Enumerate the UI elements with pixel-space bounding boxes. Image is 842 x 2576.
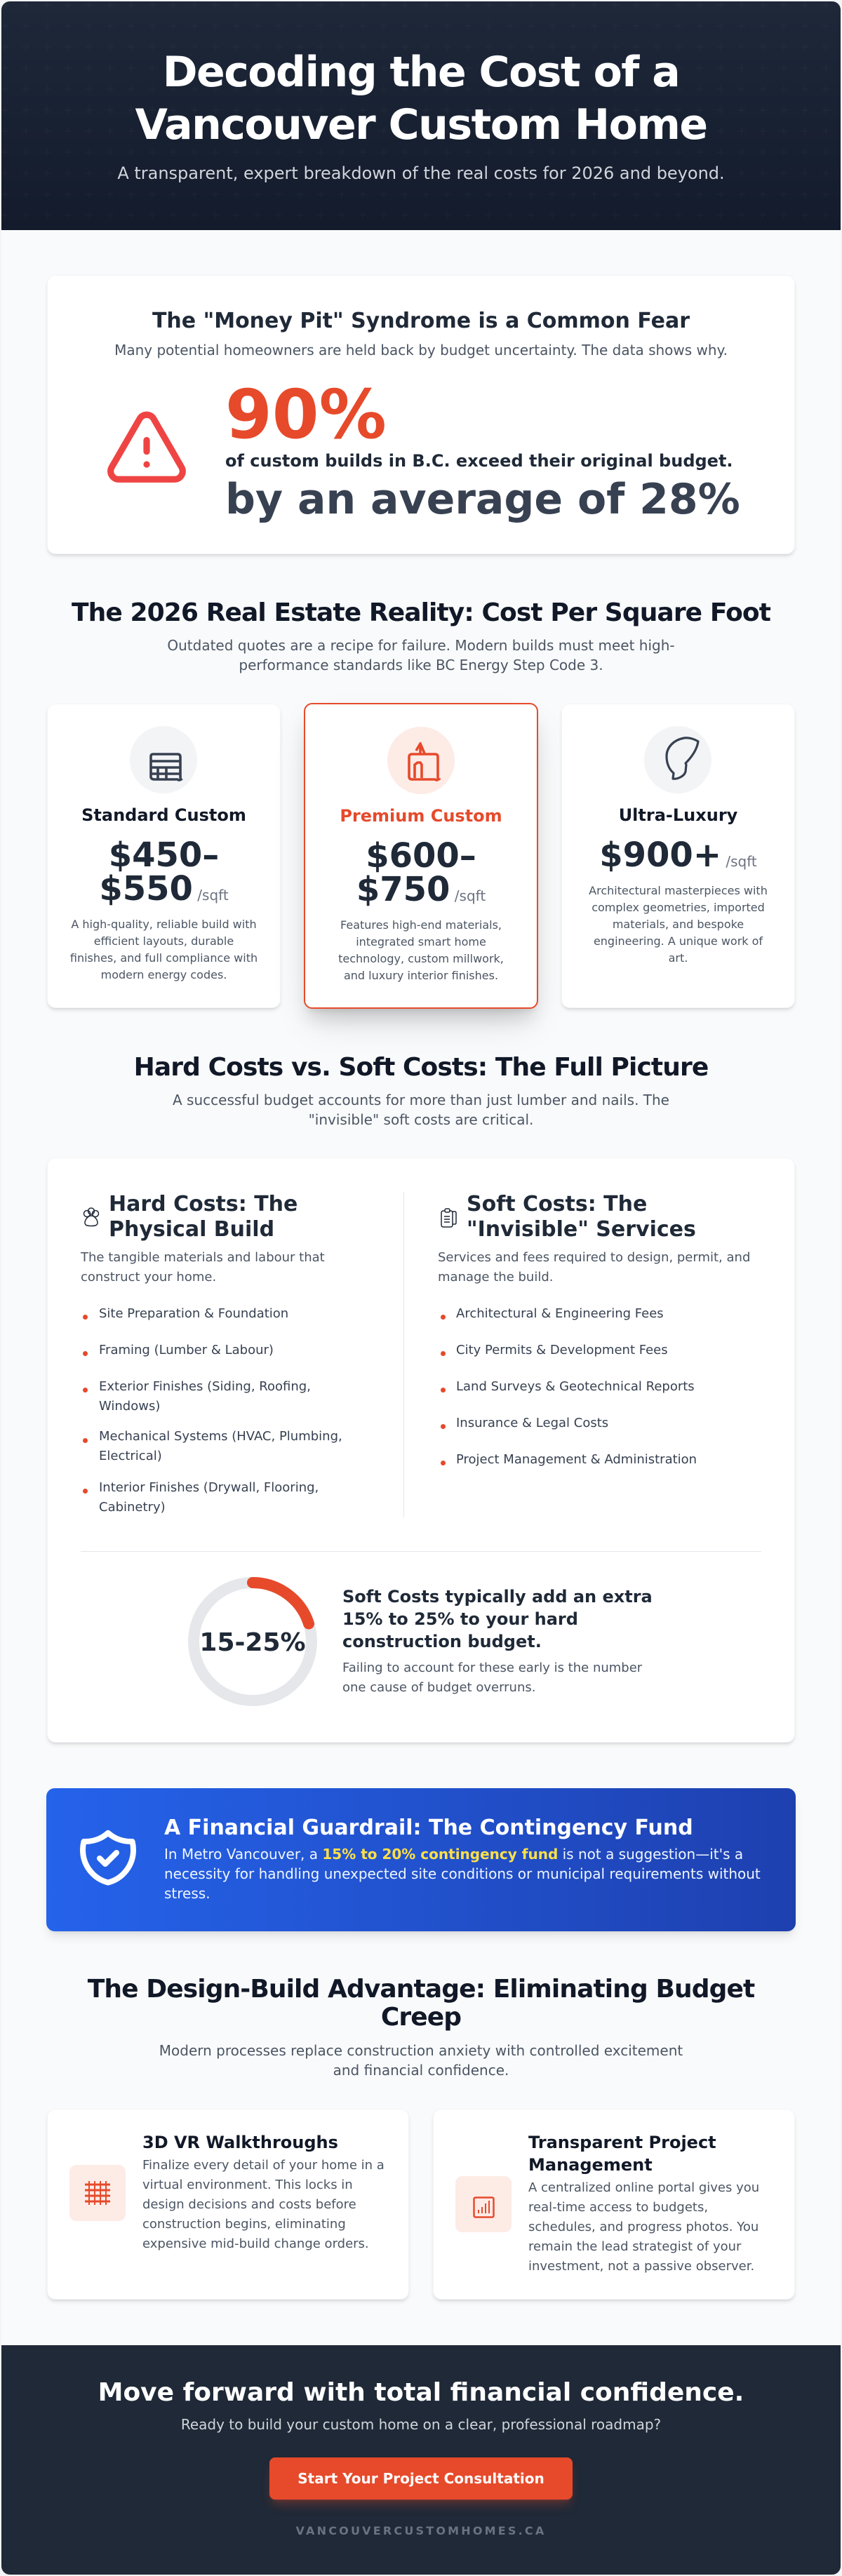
icon: warning triangle [107,411,186,483]
tier name: Standard Custom [81,805,246,825]
footer [1,2345,841,2575]
list item: Cabinetry) [99,1500,166,1515]
tier description: A high-quality, reliable build with [71,918,257,931]
soft cost note: Failing to account for these early is the number [342,1661,642,1675]
project management description: remain the lead strategist of your [528,2239,741,2254]
contingency text: necessity for handling unexpected site conditions or municipal requirements without [164,1865,761,1882]
tier price [99,836,229,908]
tier description: engineering. A unique work of [594,934,763,948]
tier price: $600– [366,836,476,876]
stat: average overrun: by an average of 28% [225,475,740,524]
VR description: expensive mid-build change orders. [142,2236,369,2251]
VR description: Finalize every detail of your home in a [142,2158,385,2173]
project management description: schedules, and progress photos. You [528,2220,759,2234]
project management title: Management [528,2155,653,2175]
header banner [1,1,841,230]
tier price [356,836,486,909]
footer subheading: Ready to build your custom home on a clear, professional roadmap? [181,2416,661,2433]
list item: Site Preparation & Foundation [99,1306,288,1321]
list item: Project Management & Administration [456,1452,697,1467]
heading: cost per square foot: The 2026 Real Estate Reality: Cost Per Square Foot [72,598,770,627]
list item: Land Surveys & Geotechnical Reports [456,1379,695,1394]
panel: money pit [47,275,795,554]
call to action button [269,2457,573,2500]
project management title: Transparent Project [528,2133,716,2152]
footer website: VANCOUVERCUSTOMHOMES.CA [296,2524,546,2537]
subheading: design-build [159,2042,683,2079]
soft costs description [438,1250,750,1284]
tier description: Architectural masterpieces with [589,884,768,897]
panel: hard and soft costs [47,1158,795,1743]
hard costs description [80,1250,325,1284]
tier description [70,918,258,981]
hard costs title [109,1192,298,1242]
soft costs title: "Invisible" Services [467,1217,696,1242]
column divider [403,1192,404,1517]
list item [99,1429,342,1463]
soft costs title: Soft Costs: The [467,1192,647,1216]
tier name: Ultra-Luxury [619,805,737,825]
project management title [528,2133,716,2175]
VR description: virtual environment. This locks in [142,2178,353,2192]
contingency text: stress. [164,1885,210,1902]
tier price: $450– [109,836,219,875]
hard costs description: construct your home. [81,1270,216,1284]
project management description: investment, not a passive observer. [528,2259,754,2274]
subheading: design-build: and financial confidence. [333,2062,509,2079]
tier description: modern energy codes. [101,968,227,981]
tier description: integrated smart home [356,935,486,948]
list item: City Permits & Development Fees [456,1343,668,1357]
panel: standard custom [47,704,281,1008]
soft costs description: manage the build. [438,1270,553,1284]
icon: clipboard [441,1208,457,1228]
heading: design-build [87,1975,755,2032]
stat description: of custom builds in B.C. exceed their original budget. [225,451,733,471]
panel: contingency fund [46,1788,796,1931]
tier description: Features high-end materials, [340,918,502,932]
tier description: and luxury interior finishes. [344,969,498,982]
section divider [81,1551,761,1552]
header subtitle: A transparent, expert breakdown of the real costs for 2026 and beyond. [117,163,725,183]
soft costs title [467,1192,696,1242]
tier description [589,884,768,965]
subheading: hard vs soft: A successful budget accounts for more than just lumber and nails. The [173,1092,669,1108]
VR title: 3D VR Walkthroughs [142,2133,338,2152]
tier price: $550 /sqft [99,869,229,908]
icon: shield check [80,1830,136,1886]
panel: project management [433,2109,795,2300]
tier description: materials, and bespoke [613,918,744,931]
soft cost callout: 15% to 25% to your hard [342,1609,578,1629]
contingency title: A Financial Guardrail: The Contingency Fund [164,1816,693,1840]
tier price: $750 /sqft [356,870,486,909]
subheading: cost per square foot: Outdated quotes are a recipe for failure. Modern builds must meet high- [167,637,675,654]
stat: 90%: 90% [225,375,387,454]
heading: design-build: Creep [381,2003,461,2032]
icon: paw [83,1207,100,1226]
tier description: art. [669,951,688,965]
subheading: hard vs soft [173,1092,669,1128]
header title: Vancouver Custom Home [135,100,707,149]
tier description: efficient layouts, durable [94,934,234,948]
tier description: complex geometries, imported [592,901,765,914]
panel: VR walkthroughs [47,2109,409,2300]
footer heading: Move forward with total financial confidence. [98,2378,744,2407]
soft cost callout: construction budget. [342,1632,542,1651]
tier description [338,918,504,982]
hard costs title: Physical Build [109,1217,274,1242]
tier name: Premium Custom [340,806,502,826]
list item: Windows) [99,1399,160,1414]
panel: premium custom [304,703,538,1009]
list item: Framing (Lumber & Labour) [99,1343,274,1357]
donut chart: 15-25% [199,1628,306,1657]
soft cost note: one cause of budget overruns. [342,1680,535,1695]
soft cost callout [342,1587,653,1651]
project management description: A centralized online portal gives you [528,2180,759,2195]
project management description [528,2180,759,2274]
subheading: cost per square foot [167,637,675,673]
tier price: $900+ /sqft [599,836,757,875]
VR description: design decisions and costs before [142,2197,356,2212]
icon: grid [69,2165,126,2221]
panel: ultra-luxury [561,704,795,1008]
subheading: cost per square foot: performance standards like BC Energy Step Code 3. [239,657,603,673]
contingency text: In Metro Vancouver, a 15% to 20% contingency fund is not a suggestion—it's a [164,1846,743,1863]
subheading: design-build: Modern processes replace construction anxiety with controlled excitement [159,2042,683,2059]
soft cost callout: Soft Costs typically add an extra [342,1587,653,1606]
list item: Electrical) [99,1449,162,1463]
hard costs description: The tangible materials and labour that [81,1250,325,1265]
icon: standard [130,726,197,793]
hard costs title: Hard Costs: The [109,1192,298,1216]
list item: Mechanical Systems (HVAC, Plumbing, [99,1429,342,1444]
project management description: real-time access to budgets, [528,2200,708,2215]
header title [135,48,707,149]
tier description: technology, custom millwork, [338,952,504,965]
soft costs description: Services and fees required to design, permit, and [438,1250,750,1265]
call to action button: Start Your Project Consultation [298,2470,544,2487]
subheading: hard vs soft: "invisible" soft costs are critical. [309,1111,533,1128]
contingency text [164,1846,761,1902]
soft cost note [342,1661,643,1695]
money pit heading: The "Money Pit" Syndrome is a Common Fear [152,309,690,333]
tier description: finishes, and full compliance with [70,951,258,965]
icon: chart tablet [455,2176,512,2232]
VR description: construction begins, eliminating [142,2217,346,2232]
donut chart [188,1577,317,1706]
icon: premium [387,727,455,794]
list item: Exterior Finishes (Siding, Roofing, [99,1379,311,1394]
list item: Insurance & Legal Costs [456,1416,608,1430]
icon: ultra-luxury [644,726,711,793]
soft costs list [441,1306,697,1467]
money pit subheading: Many potential homeowners are held back by budget uncertainty. The data shows why. [114,342,728,358]
hard costs list [83,1306,342,1515]
list item [99,1480,319,1515]
header title: Decoding the Cost of a [163,48,679,97]
heading: hard vs soft: Hard Costs vs. Soft Costs: The Full Picture [134,1053,708,1082]
heading: design-build: The Design-Build Advantage: Eliminating Budget [88,1975,754,2004]
VR description [142,2158,385,2251]
list item: Interior Finishes (Drywall, Flooring, [99,1480,319,1495]
list item [99,1379,311,1414]
list item: Architectural & Engineering Fees [456,1306,664,1321]
